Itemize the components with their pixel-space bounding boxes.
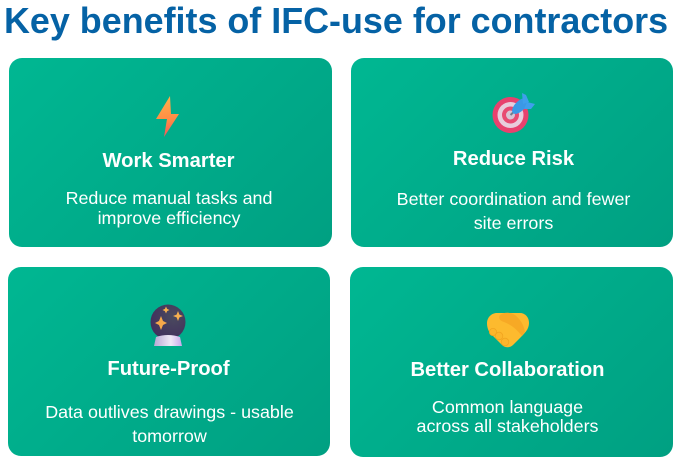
icon: crystal ball <box>150 304 186 346</box>
icon: handshake <box>487 312 529 348</box>
text: better collaboration description: Common language <box>432 397 583 417</box>
heading: better collaboration: Better Collaboration <box>410 359 605 381</box>
text: future-proof description <box>45 402 294 446</box>
text: future-proof description: tomorrow <box>132 426 207 446</box>
panel: better collaboration <box>350 267 673 457</box>
icon: lightning bolt <box>156 96 179 137</box>
text: future-proof description: Data outlives drawings - usable <box>45 402 294 422</box>
panel: reduce risk <box>351 58 673 247</box>
icon: target with dart <box>492 93 535 133</box>
text: reduce risk description: site errors <box>474 213 553 233</box>
text: reduce risk description: Better coordination and fewer <box>397 189 630 209</box>
heading: work smarter: Work Smarter <box>102 150 235 172</box>
text: work smarter description: improve efficiency <box>98 208 240 228</box>
heading: reduce risk: Reduce Risk <box>453 148 574 170</box>
text: better collaboration description: across all stakeholders <box>416 416 598 436</box>
title: Key benefits of IFC-use for contractors <box>4 1 668 41</box>
text: work smarter description: Reduce manual tasks and <box>66 188 272 208</box>
panel: work smarter <box>9 58 332 247</box>
text: reduce risk description <box>397 189 630 233</box>
text: better collaboration description <box>416 397 598 436</box>
text: work smarter description <box>66 188 272 228</box>
heading: future-proof: Future-Proof <box>107 358 230 380</box>
panel: future-proof <box>8 267 330 456</box>
